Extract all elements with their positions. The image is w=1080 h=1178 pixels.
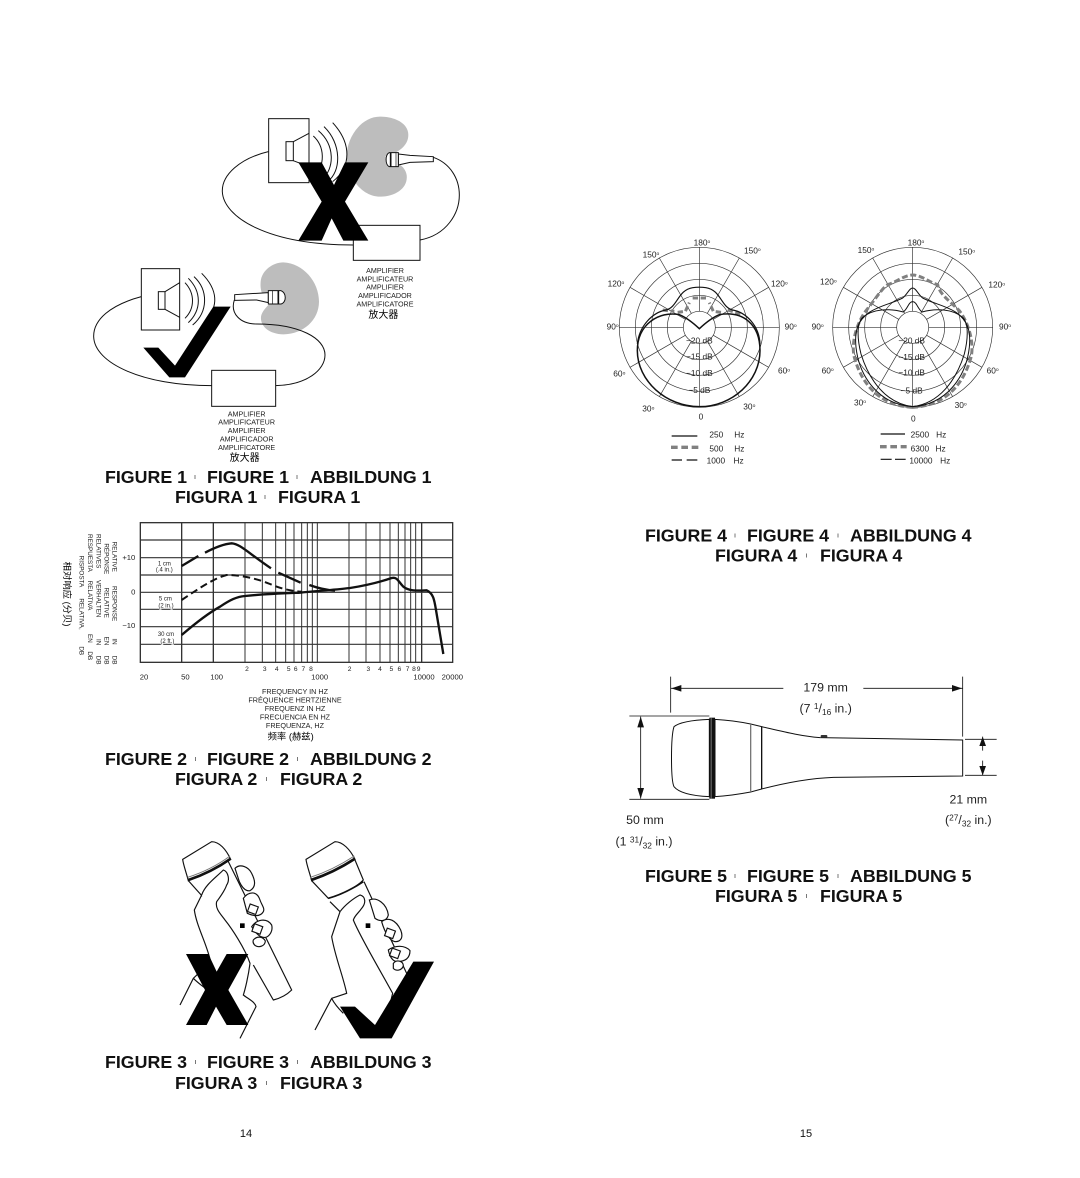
figure 2: frequency response chart (62, 523, 463, 742)
x axis title in five languages: 频率 (赫兹) (268, 731, 314, 742)
heading: figure 4: FIGURE 4 (645, 526, 727, 546)
amplifier box, correct setup (212, 370, 276, 406)
amplifier labels, correct setup: AMPLIFIER (228, 410, 266, 418)
y axis title in five languages: RESPONSE (111, 586, 118, 621)
x axis values: 2 (348, 666, 352, 673)
angle labels: right plot: −10 dB (898, 368, 925, 378)
angle labels: right plot: −15 dB (898, 352, 925, 362)
microphone side view (671, 718, 963, 799)
amplifier box, incorrect setup (353, 225, 420, 260)
angle labels: right plot: 180 (908, 237, 922, 247)
y axis title in five languages: RELATIVA (86, 581, 93, 611)
x axis values: 4 (378, 666, 382, 673)
angle labels: left plot: o (652, 405, 655, 411)
heading: figure 5: FIGURE 5 (747, 866, 829, 886)
amplifier labels, incorrect setup: AMPLIFIER (366, 267, 404, 275)
handle diameter dimension: ( (945, 813, 949, 827)
microphone, incorrect setup (386, 153, 433, 167)
length dimension (671, 677, 963, 737)
x axis values: 7 (406, 666, 410, 673)
speaker cabinet, correct setup (141, 269, 215, 330)
x axis values: 8 (309, 666, 313, 673)
angle labels: right plot: o (834, 278, 837, 284)
x axis values: 5 (287, 666, 291, 673)
heading: figure 4: FIGURA 4 (820, 546, 902, 566)
heading: figure 2: FIGURA 2 (175, 769, 257, 789)
angle labels: left plot: 60 (613, 369, 623, 379)
heading: figure 1: FIGURE 1 (207, 467, 289, 487)
angle labels: left plot: o (794, 323, 797, 329)
angle labels: right plot: o (831, 367, 834, 373)
y axis values: +10 (122, 553, 135, 562)
legend: left plot (671, 429, 744, 465)
correct grip: hand on handle (306, 842, 410, 1030)
chart grid (140, 523, 453, 662)
angle labels: left plot (607, 237, 797, 421)
heading: figure 2: FIGURE 2 (105, 749, 187, 769)
angle labels: left plot: −20 dB (686, 336, 713, 346)
heading: figure 3: FIGURA 3 (175, 1073, 257, 1093)
curve: 10000 Hz (858, 302, 967, 407)
handle diameter dimension: 32 (962, 819, 971, 829)
length dimension: 179 mm (803, 681, 848, 695)
length dimension: in.) (831, 701, 852, 715)
curve: 250 Hz (637, 287, 760, 344)
angle labels: left plot: 90 (785, 321, 794, 331)
heading: figure 4: ABBILDUNG 4 (850, 526, 972, 546)
y axis title in five languages: RELATIVE (103, 588, 110, 618)
x axis values: 6 (294, 666, 298, 673)
legend: right plot: 2500 Hz (911, 429, 946, 439)
heading: figure 1 (105, 467, 432, 507)
kidney pickup pattern, correct setup (261, 262, 319, 334)
x axis values: 9 (417, 666, 421, 673)
angle labels: left plot: o (616, 323, 619, 329)
y axis values (122, 553, 135, 630)
amplifier labels, correct setup: AMPLIFICATORE (218, 444, 275, 452)
handle diameter dimension: in.) (971, 813, 992, 827)
angle labels: left plot: o (708, 239, 711, 245)
amplifier labels, incorrect setup: AMPLIFICADOR (358, 292, 412, 300)
angle labels: left plot: 120 (771, 279, 785, 289)
x axis title in five languages: FREQUENZA, HZ (266, 721, 325, 730)
x axis title in five languages: FRÉQUENCE HERTZIENNE (248, 695, 342, 704)
y axis values: −10 (122, 621, 135, 630)
curve labels: (2 in.) (158, 603, 174, 609)
length dimension: (7 (800, 701, 810, 715)
angle labels: left plot: 150 (643, 249, 657, 259)
angle labels: left plot: o (785, 280, 788, 286)
curve: 1000 Hz (637, 314, 760, 407)
x axis values: 100 (210, 673, 223, 682)
angle labels: left plot: 30 (743, 401, 753, 411)
y axis title in five languages: VERHALTEN (95, 580, 102, 618)
curve: 500 Hz (663, 298, 743, 315)
curve: 2500 Hz (856, 288, 970, 407)
length dimension: 1 (814, 701, 819, 711)
x axis values: 50 (181, 673, 190, 682)
amplifier labels, correct setup: AMPLIFICADOR (220, 435, 274, 443)
x axis values (140, 666, 463, 682)
grille diameter dimension: / (639, 835, 643, 849)
check mark (143, 307, 231, 377)
angle labels: right plot: 90 (999, 321, 1008, 331)
grille diameter dimension (616, 716, 709, 850)
handle diameter dimension: 27 (949, 813, 959, 823)
legend: left plot: 500 Hz (709, 443, 744, 453)
angle labels: right plot (812, 237, 1011, 423)
curve labels: 5 cm (159, 597, 172, 603)
y axis title in five languages: EN (86, 634, 93, 643)
incorrect grip: hand covering grille (180, 842, 292, 1038)
angle labels: right plot: 60 (987, 365, 996, 375)
angle labels: right plot: 0 (911, 413, 916, 423)
angle labels: right plot: 30 (854, 397, 863, 407)
heading: figure 4: FIGURA 4 (715, 546, 797, 566)
angle labels: right plot: 120 (820, 277, 834, 287)
amplifier labels, correct setup: 放大器 (230, 451, 260, 464)
polar plot: low frequencies (619, 247, 779, 407)
figure 3: hand grip illustrations (180, 842, 434, 1038)
angle labels: right plot: 90 (812, 321, 821, 331)
angle labels: right plot: o (872, 247, 875, 253)
x axis values: 8 (412, 666, 416, 673)
angle labels: left plot: 90 (607, 321, 616, 331)
angle labels: left plot: o (787, 367, 790, 373)
heading: figure 1: FIGURA 1 (175, 487, 257, 507)
y axis title in five languages: RÉPONSE (103, 543, 110, 574)
y axis title in five languages: DB (78, 646, 85, 655)
length dimension: / (819, 701, 823, 715)
page number 14: 14 (240, 1128, 252, 1140)
microphone, correct setup (235, 291, 285, 304)
y axis title in five languages: DB (111, 656, 118, 664)
curve labels: (2 ft.) (160, 639, 174, 645)
x axis values: 6 (397, 666, 401, 673)
legend: left plot: 1000 Hz (707, 455, 744, 465)
angle labels: left plot: −15 dB (686, 351, 713, 361)
y axis title in five languages: RELATIVES (95, 534, 102, 568)
cable loop, correct setup (94, 297, 325, 386)
heading: figure 2 (105, 749, 432, 789)
angle labels: left plot: 120 (608, 278, 622, 288)
legend: right plot: 10000 Hz (909, 455, 950, 465)
curve labels: 30 cm (158, 632, 174, 638)
x axis values: 3 (263, 666, 267, 673)
X mark (186, 954, 248, 1025)
handle diameter dimension (945, 737, 997, 829)
angle labels: left plot: o (753, 403, 756, 409)
amplifier labels, correct setup: AMPLIFIER (228, 427, 266, 435)
polar grid (833, 247, 993, 407)
x axis values: 10000 (413, 673, 435, 682)
grille diameter dimension: 50 mm (626, 813, 664, 827)
amplifier labels, correct setup: AMPLIFICATEUR (218, 419, 275, 427)
grille diameter dimension: in.) (652, 835, 672, 849)
check mark (340, 962, 434, 1038)
heading: figure 3: FIGURE 3 (207, 1052, 289, 1072)
angle labels: right plot: 120 (988, 280, 1002, 290)
heading: figure 3: ABBILDUNG 3 (310, 1052, 432, 1072)
angle labels: right plot: 60 (822, 365, 831, 375)
angle labels: right plot: o (863, 399, 866, 405)
y axis title in five languages: IN (111, 638, 118, 645)
y axis title in five languages: RELATIVE (111, 542, 118, 572)
angle labels: right plot: 30 (955, 400, 964, 410)
y axis title in five languages: DB (103, 656, 110, 664)
y axis title in five languages: DB (95, 656, 102, 664)
y axis values: 0 (131, 588, 135, 597)
angle labels: right plot: 150 (858, 245, 872, 255)
angle labels: left plot: o (622, 280, 625, 286)
heading: figure 1: ABBILDUNG 1 (310, 467, 432, 487)
angle labels: left plot: −10 dB (686, 368, 713, 378)
handle diameter dimension: / (958, 813, 962, 827)
curve labels: 1 cm (158, 561, 171, 567)
cable loop, incorrect setup (222, 152, 459, 245)
angle labels: left plot: 60 (778, 366, 787, 376)
grille diameter dimension: 31 (630, 834, 640, 844)
curve: 30 cm (182, 578, 443, 654)
angle labels: left plot: 150 (744, 245, 758, 255)
grille diameter dimension: 32 (643, 840, 652, 850)
angle labels: right plot: o (1008, 323, 1011, 329)
heading: figure 3: FIGURA 3 (280, 1073, 362, 1093)
y axis title in five languages: RESPUESTA (86, 534, 93, 572)
y axis title in five languages: 相对响应 (分贝) (62, 562, 73, 626)
figure 5: microphone dimensions (616, 677, 997, 850)
y axis title in five languages: RISPOSTA (78, 556, 85, 587)
angle labels: left plot: o (657, 251, 660, 257)
speaker cabinet, incorrect setup (269, 119, 347, 183)
X mark (298, 162, 368, 241)
y axis title in five languages: IN (95, 639, 102, 646)
legend: right plot: 6300 Hz (911, 444, 946, 454)
handle diameter dimension: 21 mm (949, 793, 987, 807)
heading: figure 1: FIGURE 1 (105, 467, 187, 487)
heading: figure 5: FIGURA 5 (715, 886, 797, 906)
angle labels: right plot: o (964, 402, 967, 408)
x axis values: 2 (245, 666, 249, 673)
angle labels: left plot: 0 (699, 411, 704, 421)
heading: figure 1: FIGURA 1 (278, 487, 360, 507)
x axis values: 1000 (311, 673, 328, 682)
heading: figure 4 (645, 526, 972, 566)
heading: figure 3: FIGURE 3 (105, 1052, 187, 1072)
x axis values: 3 (366, 666, 370, 673)
x axis title in five languages: FREQUENCY IN HZ (262, 687, 329, 696)
amplifier labels, incorrect setup: 放大器 (368, 308, 398, 321)
angle labels: left plot: −5 dB (688, 385, 711, 395)
y axis title in five languages: RELATIVA, (78, 598, 85, 630)
legend: right plot (880, 429, 950, 465)
heading: figure 3 (105, 1052, 432, 1093)
x axis values: 20000 (442, 673, 463, 682)
heading: figure 4: FIGURE 4 (747, 526, 829, 546)
figure 4: polar patterns (607, 237, 1011, 465)
amplifier labels, incorrect setup: AMPLIFIER (366, 284, 404, 292)
angle labels: left plot: o (623, 370, 626, 376)
y axis title in five languages: EN (103, 637, 110, 646)
y axis title in five languages: DB (86, 651, 93, 660)
legend: left plot: 250 Hz (709, 429, 744, 439)
curve labels: (.4 in.) (156, 568, 173, 574)
x axis title in five languages (248, 687, 342, 742)
angle labels: left plot: 180 (694, 237, 708, 247)
polar grid (619, 247, 779, 407)
grille diameter dimension: (1 (616, 835, 627, 849)
amplifier labels, correct setup (218, 410, 275, 464)
heading: figure 2: FIGURA 2 (280, 769, 362, 789)
x axis values: 7 (301, 666, 305, 673)
angle labels: right plot: −5 dB (901, 385, 923, 395)
heading: figure 5: FIGURE 5 (645, 866, 727, 886)
amplifier labels, incorrect setup: AMPLIFICATORE (356, 300, 414, 308)
curve: 5 cm (182, 575, 302, 600)
x axis values: 20 (140, 673, 148, 682)
curve: 6300 Hz (853, 275, 972, 407)
angle labels: right plot: 150 (958, 247, 972, 257)
angle labels: right plot: o (972, 248, 975, 254)
length dimension: 16 (822, 707, 832, 717)
y axis title in five languages (62, 534, 118, 664)
angle labels: right plot: o (1002, 281, 1005, 287)
x axis title in five languages: FRECUENCIA EN HZ (260, 712, 331, 721)
heading: figure 5: ABBILDUNG 5 (850, 866, 972, 886)
x axis title in five languages: FREQUENZ IN HZ (265, 704, 326, 713)
figure 1: incorrect and correct speaker placement (94, 117, 459, 464)
heading: figure 2: FIGURE 2 (207, 749, 289, 769)
angle labels: right plot: −20 dB (898, 335, 925, 345)
angle labels: left plot: o (758, 247, 761, 253)
heading: figure 2: ABBILDUNG 2 (310, 749, 432, 769)
x axis values: 4 (275, 666, 279, 673)
x axis values: 5 (389, 666, 393, 673)
angle labels: right plot: o (996, 367, 999, 373)
amplifier labels, incorrect setup (356, 267, 414, 321)
polar plot: high frequencies (833, 247, 993, 407)
kidney pickup pattern, incorrect setup (347, 117, 408, 197)
angle labels: left plot: 30 (642, 404, 652, 414)
amplifier labels, incorrect setup: AMPLIFICATEUR (357, 275, 413, 283)
angle labels: right plot: o (821, 323, 824, 329)
angle labels: right plot: o (922, 239, 925, 245)
curve labels (156, 561, 174, 645)
curve: 1 cm (182, 543, 335, 591)
page number 15: 15 (800, 1128, 812, 1140)
heading: figure 5: FIGURA 5 (820, 886, 902, 906)
heading: figure 5 (645, 866, 972, 906)
